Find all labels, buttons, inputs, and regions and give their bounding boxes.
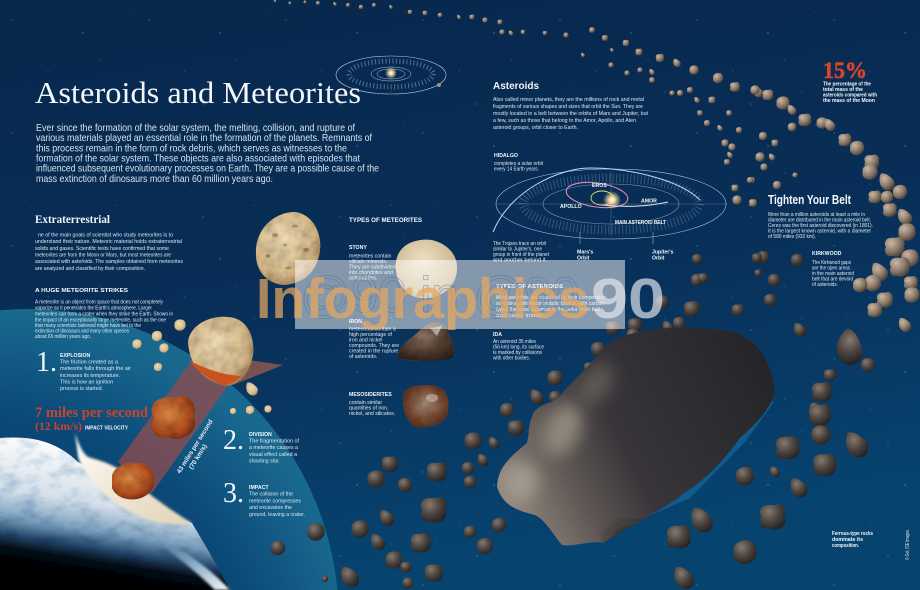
ida note: (56 km) long, its surface [493, 344, 544, 350]
meteorite type: mesosiderites: MESOSIDERITES [349, 392, 392, 398]
watermark: infographics90: 90 [591, 267, 665, 330]
copyright: © Gel. ISE Images [904, 530, 911, 560]
kirkwood note: are the open areas [812, 266, 850, 272]
tighten your belt body text: More than a million asteroids at least a mile in [768, 212, 865, 218]
kirkwood note: The Kirkwood gaps [812, 260, 851, 266]
meteorite type: mesosiderites: nickel, and silicates. [349, 411, 395, 417]
types of asteroids [496, 284, 606, 319]
stat: 15 percent: 15% [823, 58, 867, 83]
meteorite type: iron: IRON [349, 319, 362, 325]
tighten your belt body text: diameter are distributed in the main asteroid belt. [768, 218, 871, 224]
ferrous rocks note [832, 531, 873, 549]
meteorite type: stony: achondrites. [349, 276, 377, 282]
step 3: impact: meteorite compresses [249, 498, 301, 504]
extraterrestrial body text [35, 232, 183, 272]
meteor heated underside [189, 360, 241, 386]
meteorite type: iron: created in the rupture [349, 348, 398, 354]
asteroids body text: asteroid groups, orbit closer to Earth. [493, 125, 578, 131]
heading: extraterrestrial: Extraterrestrial [35, 212, 111, 226]
intro paragraph: influenced subsequent evolutionary processes on Earth. They are a possible cause of the [36, 164, 379, 174]
extraterrestrial body text: are analyzed and classified by their composition. [35, 266, 145, 272]
asteroid belt orbit diagram [493, 168, 727, 244]
meteorite strikes body text: meteorites can form a crater when they strike the Earth. Shown in [35, 312, 173, 318]
step 3: impact: IMPACT [249, 485, 269, 491]
large stony meteorite near extraterrestrial text [256, 212, 320, 285]
meteorite strikes body text: extinction of dinosaurs and many other species [35, 328, 129, 334]
extraterrestrial body text: meteorites are from the Moon or Mars, but most meteorites are [35, 252, 171, 258]
orbit labels: APOLLO [560, 204, 582, 210]
small meteor fragments [132, 319, 272, 414]
step 1: explosion: 1. [36, 347, 57, 378]
intro paragraph: mass extinction of dinosaurs more than 60 million years ago. [36, 174, 273, 185]
impact plume [75, 433, 192, 524]
types of asteroids: types the most common in the outer main belt [496, 307, 601, 313]
ferrous rocks note: dominate its [832, 537, 863, 543]
types of asteroids: as carbon, silicate or metallic bodies, with carbon [496, 301, 604, 307]
kirkwood note: belt that are devoid [812, 276, 853, 282]
asteroids body text: a few, such as those that belong to the Amor, Apollo, and Aten [493, 118, 636, 124]
kirkwood note: KIRKWOOD [812, 251, 842, 257]
earth with cloud cover [0, 433, 230, 590]
earth limb streak [150, 535, 230, 590]
impact velocity callout [35, 405, 148, 433]
meteorite type: mesosiderites [349, 392, 395, 417]
kirkwood note: of asteroids. [812, 282, 838, 288]
types of asteroids: TYPES OF ASTEROIDS [496, 284, 563, 290]
meteorite type: mesosiderites: contain similar [349, 400, 382, 406]
types of asteroids: and stony inside. [496, 313, 544, 319]
meteor: impacting fragment [112, 463, 154, 499]
step 3: impact: ground, leaving a crater. [249, 512, 305, 518]
ida note: An asteroid 35 miles [493, 339, 536, 345]
extraterrestrial body text: associated with asteroids. The samples obtained from meteorites [35, 259, 183, 265]
meteor: upper fireball [188, 317, 253, 386]
trojans note: group in front of the planet [493, 252, 550, 258]
stat: 15 percent: asteroids compared with [823, 92, 877, 98]
large asteroid [490, 325, 780, 552]
kirkwood note [812, 251, 854, 288]
ida note: with other bodies. [493, 356, 530, 362]
meteorite type: iron: meteorites contain a [349, 326, 396, 332]
ida note: is marked by collisions [493, 350, 542, 356]
step 1: explosion: The friction created as a [60, 360, 118, 366]
ida note: IDA [493, 332, 502, 338]
step 2: division: 2. [223, 425, 244, 456]
meteorite type: iron: high percentage of [349, 332, 393, 338]
meteorite type: stony: meteorites contain [349, 254, 392, 260]
step 3: impact [223, 478, 305, 518]
meteorite type: mesosiderites: quantities of iron, [349, 406, 389, 412]
planet: large blue globe glow on the left [0, 309, 338, 590]
step 2: division [223, 425, 300, 464]
asteroid belt: light rocks arcing across the top and right [274, 0, 920, 332]
meteorite type: stony: silicate minerals. [349, 259, 387, 265]
hidalgo note: completes a solar orbit [494, 161, 544, 167]
kirkwood note: in the main asteroid [812, 271, 854, 277]
step 3: impact: and excavates the [249, 505, 292, 511]
step 2: division: a meteorite causes a [249, 445, 298, 451]
step 1: explosion: EXPLOSION [60, 353, 91, 359]
meteorite type: iron [349, 319, 399, 360]
ferrous rocks note: Ferrous-type rocks [832, 531, 873, 537]
step 1: explosion: meteorite falls through the air [60, 366, 131, 372]
intro paragraph: formation of the solar system. These objects are also associated with episodes that [36, 154, 360, 164]
step 3: impact: 3. [223, 478, 244, 509]
step 1: explosion: process is started. [60, 386, 103, 392]
extraterrestrial body text: ne of the main goals of scientist who study meteorites is to [38, 232, 173, 238]
heading: types of meteorites: TYPES OF METEORITES [349, 218, 422, 224]
meteorite type: stony: They are subdivided [349, 264, 396, 270]
meteorite strikes body text: the impact of an exceptionally large meteorite, such as the one [35, 318, 166, 324]
intro paragraph: this process remain in the form of rock debris, which serves as witnesses to the [36, 144, 347, 154]
orbit labels: Mars's [577, 250, 593, 256]
specimen: mesosiderite [403, 385, 449, 428]
asteroid shadow edge [640, 398, 774, 520]
stat: 15 percent: total mass of the [823, 87, 863, 93]
step 1: explosion [36, 347, 131, 392]
orbit labels: Orbit [577, 256, 590, 262]
extraterrestrial body text: solids and gases. Scientific tests have confirmed that some [35, 246, 169, 252]
step 2: division: The fragmentation of [249, 438, 300, 444]
trojans note: The Trojans trace an orbit [493, 241, 547, 247]
meteorite strikes body text [35, 300, 173, 340]
meteorite type: stony: STONY [349, 245, 367, 251]
step 2: division: DIVISION [249, 432, 272, 438]
watermark: infographics90: @90 in @90 [300, 267, 579, 323]
meteorite strikes body text: about 65 million years ago. [35, 334, 91, 340]
hidalgo note: every 14 Earth years. [494, 166, 539, 172]
entry speed label along beam: 43 miles per second [176, 419, 215, 475]
orbit labels: AMOR [641, 198, 657, 204]
meteor: orange fragment [152, 396, 195, 439]
tighten your belt body text [768, 212, 873, 240]
meteorite type: iron: iron and nickel [349, 338, 382, 344]
step 2: division: shooting star. [249, 458, 280, 464]
intro paragraph: various materials played an essential role in the formation of the planets. Remnants of [36, 133, 372, 144]
meteorite type: iron: compounds. They are [349, 343, 399, 349]
orbit labels: MAIN ASTEROID BELT [615, 220, 667, 226]
impact velocity callout: IMPACT VELOCITY [85, 426, 128, 432]
trojans note: similar to Jupiter's, one [493, 246, 542, 252]
meteorite strikes body text: vaporize as it penetrates the Earth's atmosphere. Larger [35, 306, 152, 312]
meteorite strikes body text: that many scientists believed might have led to the [35, 323, 141, 329]
main title: Asteroids and Meteorites [35, 75, 361, 110]
asteroids body text: mostly located in a belt between the orbits of Mars and Jupiter, but [493, 111, 649, 117]
impact velocity callout: (12 km/s) [35, 421, 82, 433]
meteor flame wake [233, 360, 283, 385]
step 2: division: visual effect called a [249, 452, 297, 458]
hidalgo note: HIDALGO [494, 153, 518, 159]
entry speed label along beam: (70 km/s) [188, 443, 209, 471]
tighten your belt body text: Ceres was the first asteroid discovered (in 1801). [768, 223, 873, 229]
step 3: impact: The collision of the [249, 492, 293, 498]
ferrous rocks note: composition. [832, 543, 859, 549]
impact velocity callout: 7 miles per second [35, 405, 148, 421]
heading: a huge meteorite strikes: A HUGE METEORITE STRIKES [35, 288, 128, 294]
ida note [493, 332, 544, 362]
orbit labels: Orbit [652, 256, 665, 262]
extraterrestrial body text: understand their nature. Meteoric material holds extraterrestrial [35, 239, 182, 245]
hidalgo note [494, 153, 544, 172]
asteroid belt: dark rocks scattered in the lower half [271, 251, 875, 589]
meteorite type: stony [349, 245, 396, 282]
heading: asteroids: Asteroids [493, 80, 539, 92]
stat: 15 percent: The percentage of the [823, 82, 871, 88]
watermark: infographics90: Infographics [256, 267, 589, 330]
meteorite type: iron: of asteroids. [349, 354, 377, 360]
asteroids body text [493, 97, 649, 131]
orbit labels: Jupiter's [652, 250, 674, 256]
specimen: iron meteorite [398, 322, 454, 361]
tighten your belt body text: of 580 miles (932 km). [768, 234, 816, 240]
stat: 15 percent: the mass of the Moon [823, 98, 875, 104]
asteroids body text: Also called minor planets, they are the millions of rock and metal [493, 97, 644, 103]
heading: tighten your belt: Tighten Your Belt [768, 193, 852, 207]
step 1: explosion: increases its temperature. [60, 373, 120, 379]
meteorite strikes body text: A meteorite is an object from space that does not completely [35, 300, 163, 306]
meteor trail beam [118, 363, 227, 493]
intro paragraph: Ever since the formation of the solar system, the melting, collision, and rupture of [36, 123, 355, 134]
mini solar system diagram [336, 56, 446, 94]
intro paragraph [36, 123, 379, 185]
step 1: explosion: This is how an ignition [60, 380, 113, 386]
stat: 15 percent [823, 58, 877, 104]
trojans note: and another behind it. [493, 258, 547, 264]
asteroids body text: fragments of various shapes and sizes that orbit the Sun. They are [493, 104, 643, 110]
trojans note [493, 241, 550, 264]
orbit labels [560, 183, 674, 262]
types of asteroids: Most asteroids are classified by their composition [496, 295, 606, 301]
tighten your belt body text: It is the largest known asteroid, with a diameter [768, 228, 871, 234]
meteorite type: stony: into chondrites and [349, 270, 393, 276]
specimen: stony meteorite [396, 240, 457, 298]
orbit labels: EROS [592, 183, 607, 189]
